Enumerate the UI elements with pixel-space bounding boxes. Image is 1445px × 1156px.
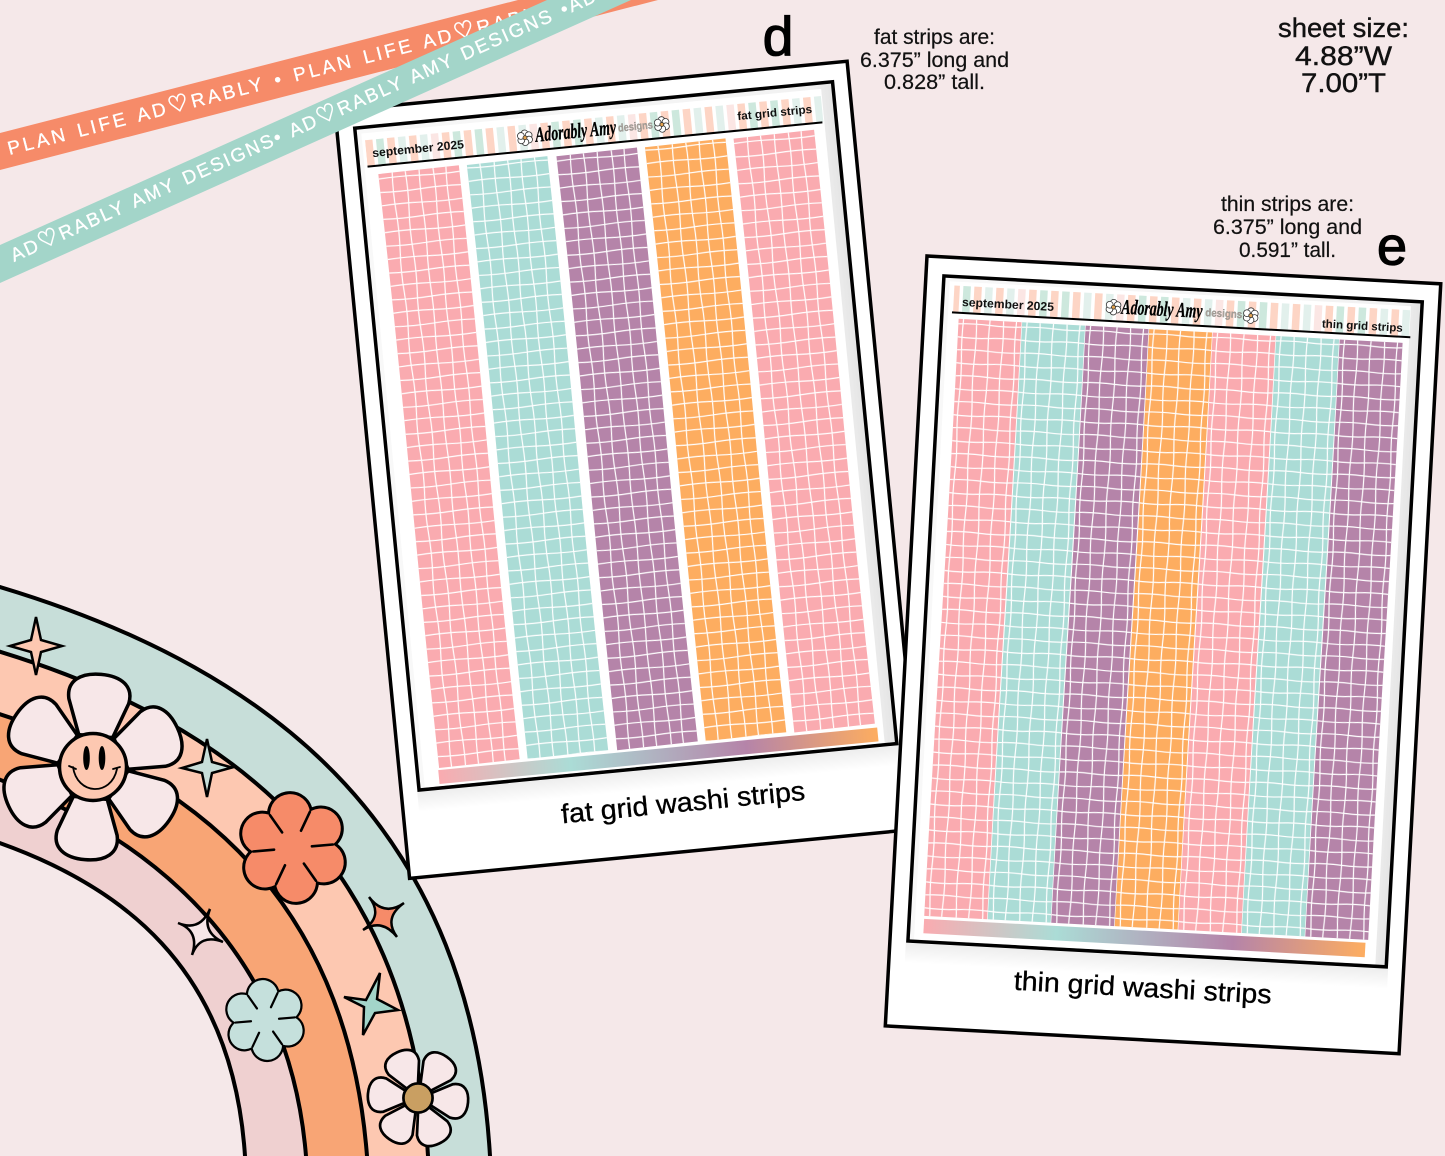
icon: white star — [178, 909, 223, 955]
strip 3: purple — [556, 147, 698, 750]
note: fat strips size — [860, 26, 1009, 94]
note: sheet size: sheet size: — [1278, 13, 1409, 43]
rainbow band: pink — [0, 770, 306, 1156]
note: fat strips size: 0.828” tall. — [884, 71, 985, 94]
icon: daisy — [366, 1045, 470, 1151]
strip 3: purple — [1051, 326, 1149, 926]
header stripes — [953, 286, 1411, 336]
strip 2: teal — [467, 156, 608, 759]
header stripes — [365, 96, 823, 166]
panel: fat grid washi strips card — [335, 61, 922, 878]
icon: coral flower — [239, 790, 347, 906]
note: thin strips size — [1213, 193, 1362, 262]
card caption: thin grid washi strips — [1013, 966, 1272, 1010]
strip 4: orange — [645, 138, 786, 741]
strip 1: pink — [924, 319, 1022, 919]
panel: thin grid washi strips card — [885, 256, 1441, 1054]
header: sheet name: fat grid strips — [737, 104, 813, 123]
note: sheet size: 4.88”W — [1295, 41, 1393, 71]
icon: teal star — [344, 973, 398, 1035]
strip 6: teal — [1242, 336, 1339, 936]
rainbow band: orange — [0, 709, 367, 1156]
card caption: fat grid washi strips — [560, 776, 806, 829]
rainbow band: teal — [0, 587, 490, 1156]
note: thin strips size: 0.591” tall. — [1239, 239, 1336, 262]
strip 2: teal — [988, 322, 1085, 923]
note: sheet size: 7.00”T — [1301, 68, 1386, 98]
note: thin strips size: thin strips are: — [1221, 193, 1354, 216]
header: month: september 2025 — [372, 137, 465, 160]
label: e: e — [1377, 216, 1407, 276]
note: thin strips size: 6.375” long and — [1213, 216, 1362, 239]
logo: Adorably Amy — [1120, 295, 1204, 323]
header rule — [368, 122, 822, 167]
strip 7: purple — [1305, 339, 1403, 940]
icon: peach sparkle — [10, 617, 62, 675]
header: month: september 2025 — [962, 295, 1055, 314]
rainbow inner cut-out — [0, 832, 245, 1156]
logo: designs — [617, 119, 653, 135]
gradient bar — [438, 727, 879, 784]
strip 1: pink — [378, 165, 520, 768]
icon: mint sparkle — [182, 739, 232, 797]
note: fat strips size: fat strips are: — [874, 26, 995, 49]
header rule — [952, 312, 1410, 337]
logo: Adorably Amy — [533, 115, 617, 147]
rainbow band: peach — [0, 649, 428, 1156]
logo: designs — [1205, 307, 1243, 321]
strip 5: pink — [733, 130, 875, 733]
rainbow illustration — [0, 587, 490, 1156]
note: fat strips size: 6.375” long and — [860, 49, 1009, 72]
icon: smiley flower — [0, 672, 190, 862]
icon: mint flower — [225, 977, 305, 1063]
header: sheet name: thin grid strips — [1322, 318, 1403, 335]
strip 5: pink — [1178, 333, 1276, 933]
label: d: d — [763, 5, 793, 67]
strip 4: orange — [1115, 329, 1212, 930]
note: sheet size — [1278, 13, 1409, 98]
icon: coral star — [363, 897, 404, 937]
gradient bar — [923, 919, 1366, 957]
